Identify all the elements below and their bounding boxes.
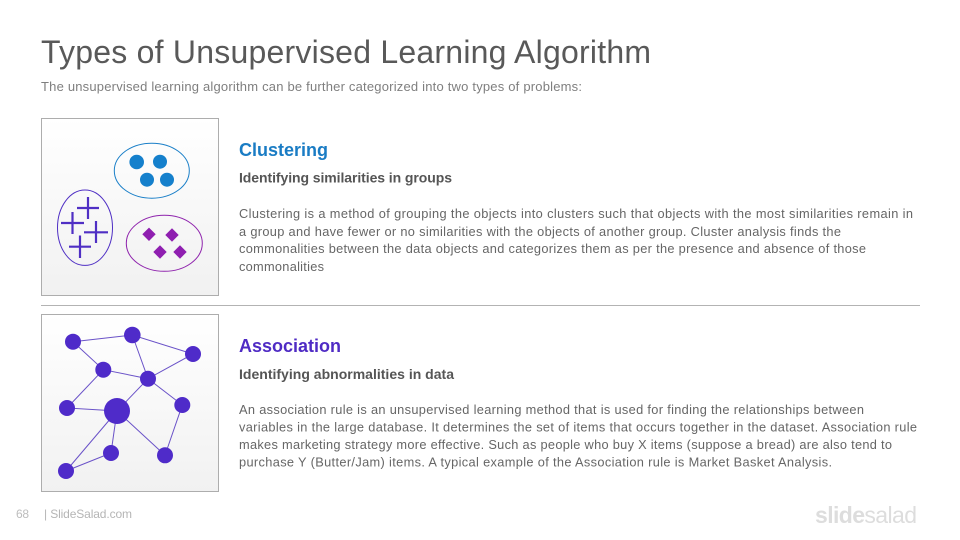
text block: clustering description: commonalities bbox=[239, 259, 324, 274]
text block: clustering description bbox=[239, 206, 913, 274]
network links bbox=[66, 335, 193, 471]
heading: clustering: Clustering bbox=[239, 140, 328, 160]
text block: association description: variables in the large database. It determines the set of items that occurs together in the dataset. Association rule bbox=[239, 420, 917, 434]
text block: clustering description: commonalities between the data objects and categorizes them as per the presence and absence of those bbox=[239, 241, 866, 256]
violet cluster of plus signs bbox=[58, 190, 112, 265]
title: Types of Unsupervised Learning Algorithm bbox=[41, 34, 651, 70]
panel: clustering bbox=[42, 118, 913, 296]
footer page number: 68 bbox=[16, 507, 29, 521]
network nodes bbox=[58, 327, 201, 479]
text block: association description: makes marketing strategy more effective. Such as people who buy X items (suppose a bread) are also tend to bbox=[239, 437, 892, 452]
heading: association: Association bbox=[239, 336, 341, 356]
magenta cluster of diamonds bbox=[126, 215, 202, 271]
subheading: association: Identifying abnormalities in data bbox=[239, 366, 454, 382]
text block: association description: purchase Y (Butter/Jam) items. A typical example of the Association rule is Market Basket Analysis. bbox=[239, 454, 832, 470]
subheading: clustering: Identifying similarities in groups bbox=[239, 170, 452, 186]
text block: clustering description: Clustering is a method of grouping the objects into clusters such that objects with the most similarities remain in bbox=[239, 206, 913, 221]
logo: slidesalad bbox=[815, 502, 917, 528]
footer source: | SlideSalad.com bbox=[44, 507, 132, 521]
text block: association description bbox=[239, 402, 917, 470]
text block: clustering description: a group and have fewer or no similarities with the objects of another group. Cluster analysis finds the bbox=[239, 224, 841, 239]
text block: association description: An association rule is an unsupervised learning method that is used for finding the relationships between bbox=[239, 402, 864, 417]
subtitle: The unsupervised learning algorithm can be further categorized into two types of problems: bbox=[41, 79, 582, 94]
icon: clustering diagram bbox=[42, 118, 218, 296]
icon: network diagram bbox=[42, 314, 218, 492]
panel: association bbox=[42, 314, 917, 492]
blue cluster of dots bbox=[114, 143, 189, 198]
